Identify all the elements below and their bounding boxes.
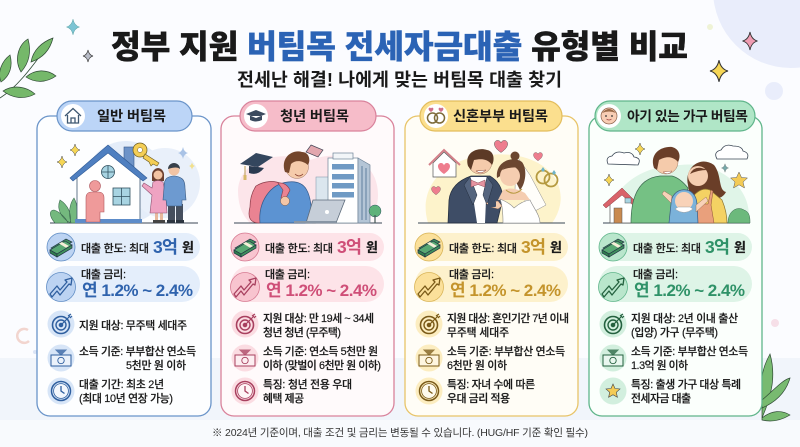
loan limit row: 원 bbox=[734, 240, 746, 255]
income criteria: 1.3억 원 이하 bbox=[631, 358, 688, 372]
loan period: 대출 기간: 최초 2년 bbox=[79, 377, 164, 391]
loan limit row: 3억 bbox=[521, 237, 546, 257]
eligibility: 청년 청년 (무주택) bbox=[263, 326, 341, 339]
features bbox=[416, 378, 535, 405]
panel: 청년 버팀목 bbox=[221, 101, 394, 416]
income criteria: 이하 (맞벌이 6천만 원 이하) bbox=[263, 358, 381, 372]
header pill: 청년 버팀목 bbox=[240, 101, 376, 131]
eligibility bbox=[416, 310, 569, 339]
loan period bbox=[48, 377, 173, 405]
eligibility: 무주택 세대주 bbox=[447, 325, 509, 339]
loan limit row: 대출 한도: 최대 bbox=[265, 241, 333, 255]
header pill: 신혼부부 버팀목 bbox=[420, 101, 562, 131]
eligibility bbox=[232, 310, 374, 339]
interest rate row: 연 1.2% ~ 2.4% bbox=[266, 281, 377, 300]
income criteria: 소득 기준: 부부합산 연소득 bbox=[447, 344, 565, 358]
features: 특징: 자녀 수에 따른 bbox=[447, 378, 535, 391]
loan period: (최대 10년 연장 가능) bbox=[79, 391, 173, 405]
loan limit row: 원 bbox=[550, 240, 562, 255]
interest rate row: 연 1.2% ~ 2.4% bbox=[82, 281, 193, 300]
features: 전세자금 대출 bbox=[631, 391, 691, 405]
loan limit row: 대출 한도: 최대 bbox=[449, 241, 517, 255]
interest rate row bbox=[230, 266, 384, 302]
panel: 아기 있는 가구 버팀목 bbox=[589, 101, 762, 416]
eligibility: (입양) 가구 (무주택) bbox=[631, 326, 718, 339]
interest rate row: 연 1.2% ~ 2.4% bbox=[634, 281, 745, 300]
loan limit row: 원 bbox=[182, 240, 194, 255]
header pill: 아기 있는 가구 버팀목: 아기 있는 가구 버팀목 bbox=[627, 109, 748, 124]
loan limit row: 대출 한도: 최대 bbox=[81, 241, 149, 255]
interest rate row: 대출 금리: bbox=[633, 267, 678, 281]
illustration: wedding couple, hearts and rings bbox=[418, 140, 565, 223]
features: 혜택 제공 bbox=[263, 392, 304, 405]
loan limit row: 대출 한도: 최대 bbox=[633, 241, 701, 255]
header pill: 일반 버팀목: 일반 버팀목 bbox=[97, 108, 166, 125]
income criteria bbox=[600, 344, 748, 372]
eligibility bbox=[48, 310, 187, 338]
illustration: student, laptop and buildings bbox=[234, 145, 382, 223]
title: 정부 지원 버팀목 전세자금대출 유형별 비교 bbox=[111, 29, 688, 65]
loan limit row: 3억 bbox=[705, 237, 730, 257]
features: 우대 금리 적용 bbox=[447, 391, 510, 405]
eligibility: 지원 대상: 혼인기간 7년 이내 bbox=[447, 311, 569, 325]
interest rate row bbox=[46, 266, 200, 302]
loan limit row: 원 bbox=[366, 240, 378, 255]
income criteria: 소득 기준: 부부합산 연소득 bbox=[631, 344, 748, 358]
header pill: 청년 버팀목: 청년 버팀목 bbox=[280, 108, 349, 125]
panel: 일반 버팀목 bbox=[37, 101, 211, 416]
income criteria: 소득 기준: 연소득 5천만 원 bbox=[263, 344, 378, 358]
interest rate row: 대출 금리: bbox=[81, 267, 126, 281]
header pill: 아기 있는 가구 버팀목 bbox=[595, 101, 755, 131]
interest rate row: 대출 금리: bbox=[265, 267, 310, 281]
eligibility bbox=[600, 310, 738, 339]
loan limit row bbox=[599, 233, 752, 261]
footnote: ※ 2024년 기준이며, 대출 조건 및 금리는 변동될 수 있습니다. (HUG/HF 기준 확인 필수) bbox=[212, 426, 588, 439]
panel: 신혼부부 버팀목 bbox=[405, 101, 578, 416]
eligibility: 지원 대상: 2년 이내 출산 bbox=[631, 311, 738, 325]
interest rate row: 연 1.2% ~ 2.4% bbox=[450, 281, 561, 300]
loan limit row bbox=[231, 233, 384, 261]
interest rate row: 대출 금리: bbox=[449, 267, 494, 281]
income criteria: 소득 기준: 부부합산 연소득 bbox=[79, 344, 196, 358]
illustration: house, key and couple bbox=[50, 141, 200, 223]
features bbox=[600, 377, 741, 405]
features bbox=[232, 377, 352, 405]
income criteria: 5천만 원 이하 bbox=[126, 358, 186, 372]
decoration: sparkles bbox=[66, 19, 758, 82]
income criteria bbox=[416, 344, 565, 372]
loan limit row: 3억 bbox=[337, 237, 362, 257]
subtitle: 전세난 해결! 나에게 맞는 버팀목 대출 찾기 bbox=[237, 69, 562, 90]
eligibility: 지원 대상: 무주택 세대주 bbox=[79, 318, 187, 332]
features: 특징: 청년 전용 우대 bbox=[263, 377, 352, 391]
header pill: 신혼부부 버팀목: 신혼부부 버팀목 bbox=[453, 108, 548, 125]
income criteria: 6천만 원 이하 bbox=[447, 358, 507, 372]
header pill: 일반 버팀목 bbox=[57, 101, 192, 131]
decoration: bottom-right leaves bbox=[762, 354, 790, 421]
loan limit row: 3억 bbox=[153, 237, 178, 257]
decoration: left leaf branch bbox=[0, 38, 56, 98]
features: 특징: 출생 가구 대상 특례 bbox=[631, 377, 741, 391]
interest rate row bbox=[414, 266, 568, 302]
income criteria bbox=[48, 344, 196, 372]
illustration: family with baby and house bbox=[603, 143, 750, 223]
income criteria bbox=[232, 344, 381, 372]
interest rate row bbox=[598, 266, 752, 302]
loan limit row bbox=[47, 233, 200, 261]
loan limit row bbox=[415, 233, 568, 261]
eligibility: 지원 대상: 만 19세 ~ 34세 bbox=[263, 311, 374, 325]
